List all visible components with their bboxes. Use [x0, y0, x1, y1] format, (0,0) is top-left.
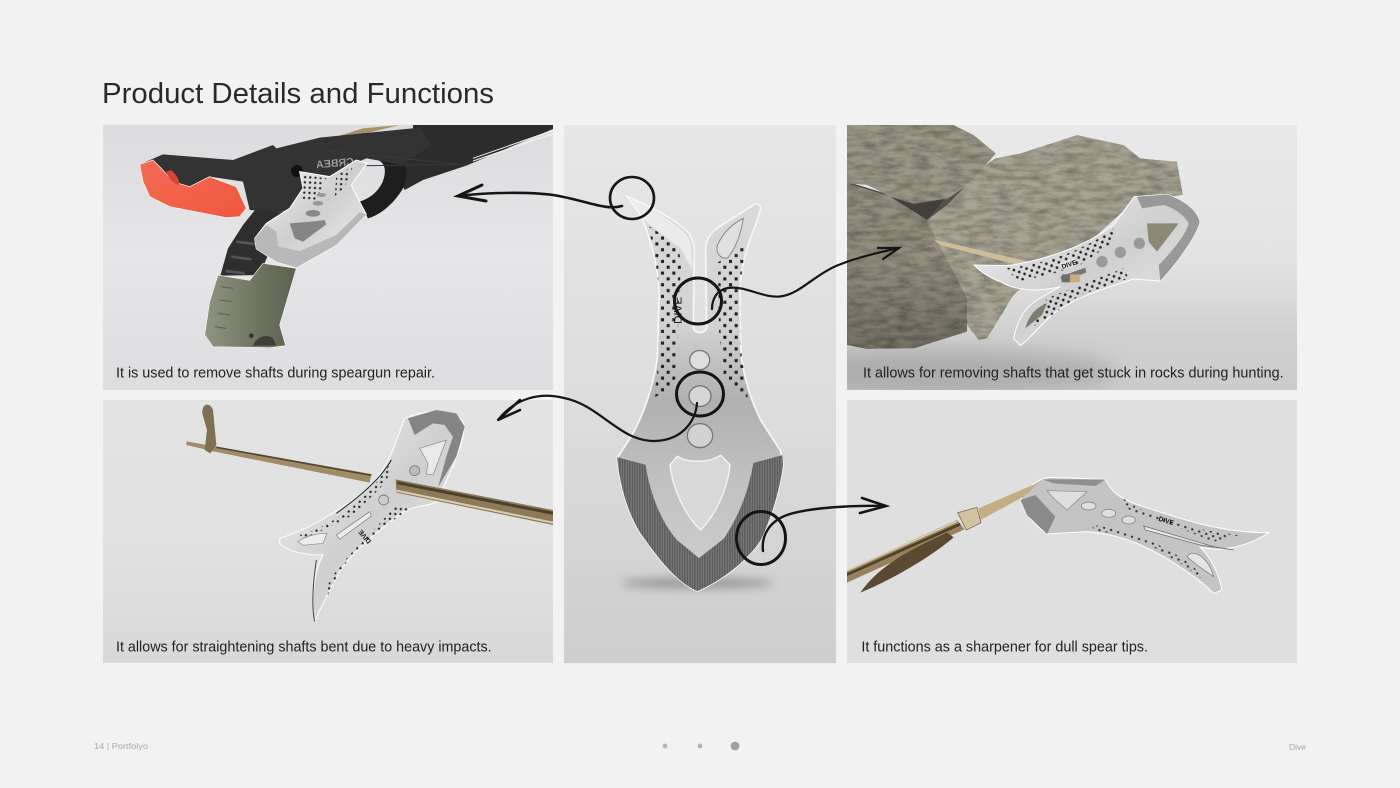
- illustration: stuck shaft: [934, 240, 1028, 264]
- perforated grip right: [718, 245, 748, 400]
- illustration: tool side view: DIVE: [1158, 516, 1175, 527]
- tool on handle: [255, 160, 367, 268]
- illustration: shaft front: [396, 479, 553, 525]
- panel: speargun repair: [103, 125, 553, 390]
- shield cutout: [670, 455, 730, 530]
- footer: page label: 14 | Portfolyo: [94, 741, 148, 751]
- caption: It allows for removing shafts that get stuck in rocks during hunting.: [863, 366, 1284, 382]
- perforated grip left: [647, 225, 681, 398]
- caption: It is used to remove shafts during speargun repair.: [116, 366, 435, 382]
- teardrop cutout: [717, 218, 743, 258]
- illustration: shaft rear with flopper: [186, 405, 371, 483]
- caption: It functions as a sharpener for dull spear tips.: [861, 640, 1148, 656]
- arrow: blade tip to speargun panel: [458, 177, 654, 219]
- holes: [687, 350, 713, 448]
- illustration: speargun handle with tool: [140, 125, 553, 348]
- crack shadow: [890, 187, 965, 220]
- panel: sharpener: [847, 400, 1297, 663]
- title: Product Details and Functions: [102, 78, 494, 110]
- product: tool front view: [617, 196, 783, 591]
- arrow: hole to straightening panel: [498, 372, 724, 441]
- footer: pagination dots: [663, 742, 739, 750]
- ground shadow: [847, 342, 1115, 390]
- grinding edge: [617, 455, 783, 591]
- illustration: tool seen from above: DIVE: [357, 528, 373, 545]
- rock shading: [847, 282, 967, 349]
- panel: rock extraction: [847, 125, 1297, 390]
- footer: project name: Dive: [1289, 742, 1306, 752]
- panel: straightening shafts: [103, 400, 553, 663]
- illustration: rocks: [847, 125, 1183, 349]
- arrow: edge to sharpener panel: [736, 498, 886, 564]
- illustration: speargun handle with tool: CRBEA: [315, 156, 354, 171]
- caption: It allows for straightening shafts bent due to heavy impacts.: [116, 640, 492, 656]
- arrow: slot to rock panel: [674, 248, 899, 324]
- floor shadow: [621, 578, 774, 589]
- blade highlight: [629, 198, 692, 269]
- panel: central product view: [564, 125, 836, 663]
- rock underlay: [847, 155, 997, 348]
- brand mark: DIVE: [672, 296, 684, 324]
- illustration: tool on rock: [974, 194, 1200, 346]
- illustration: tool side view: [1020, 477, 1269, 593]
- illustration: spear tip: [847, 482, 1040, 593]
- illustration: tool on rock: DIVE: [1061, 259, 1078, 271]
- illustration: tool seen from above: [280, 410, 465, 622]
